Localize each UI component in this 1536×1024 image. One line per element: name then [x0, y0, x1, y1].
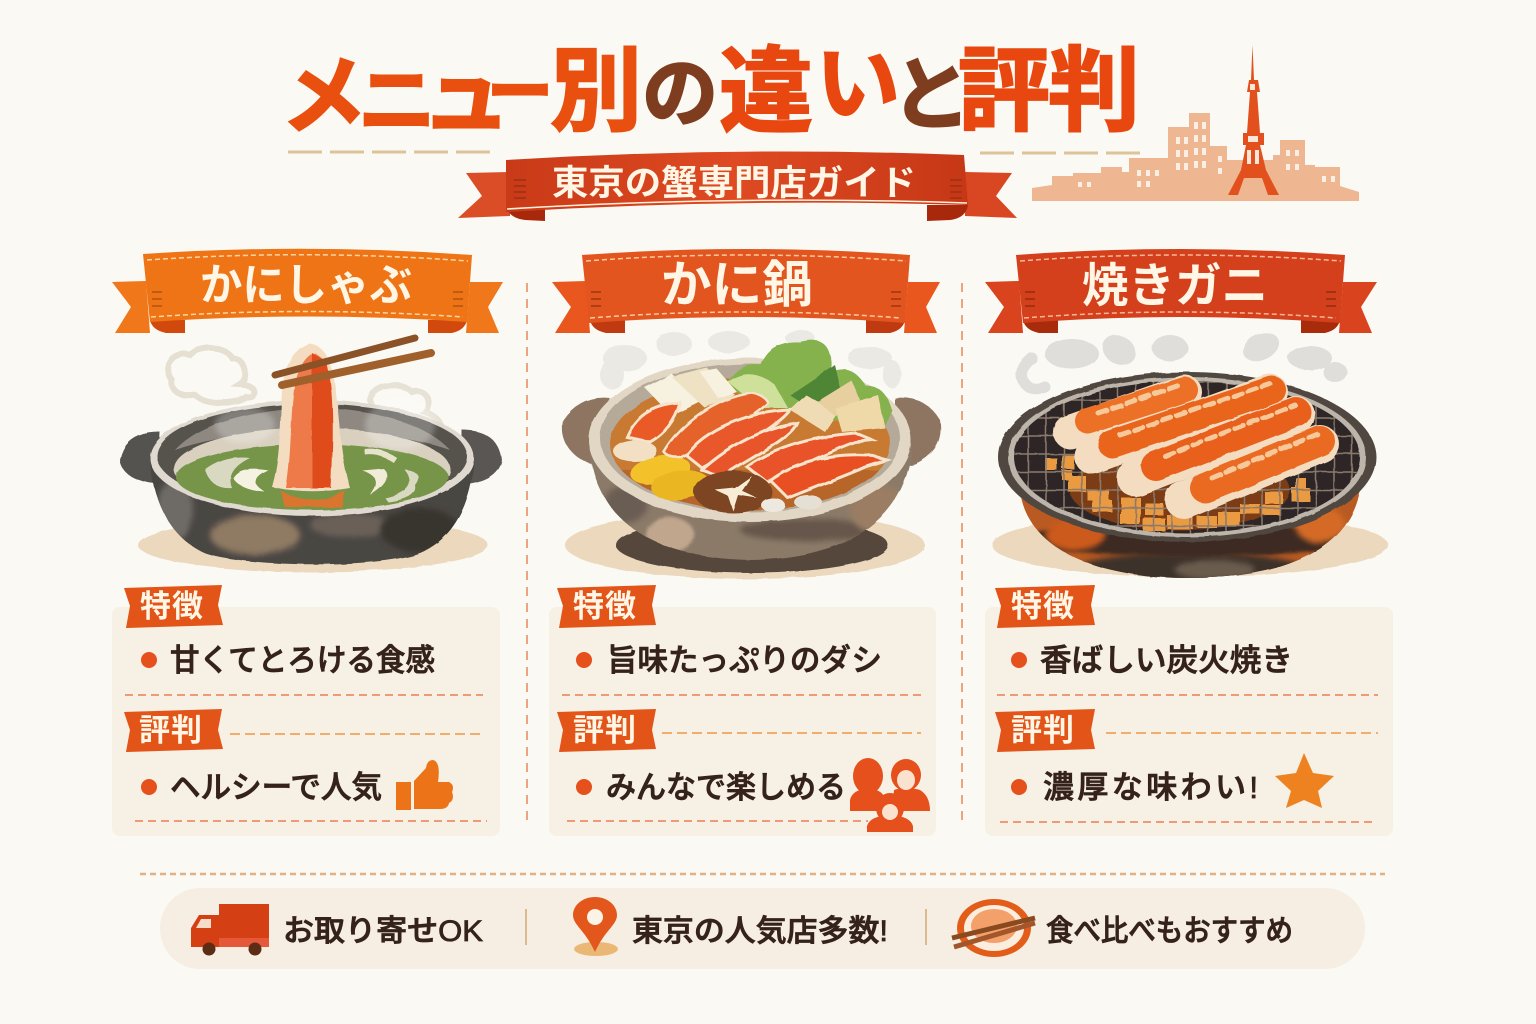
panel: kani shabu: [112, 249, 503, 836]
divider lines: [527, 283, 962, 825]
title: 違: [719, 39, 813, 144]
tag: reputation: 評判: [573, 713, 636, 748]
tag: features: [124, 585, 223, 628]
illustration: crab hot pot: [562, 330, 941, 579]
heading text: かにしゃぶ: [200, 261, 412, 310]
footer text: compare: 食べ比べもおすすめ: [1046, 915, 1293, 948]
title: 評判: [958, 41, 1140, 143]
tag: reputation: [557, 709, 656, 752]
panel: shabu text card: [112, 585, 500, 836]
footer bar: [160, 888, 1365, 969]
heading text: 焼きガニ: [1082, 259, 1268, 312]
title: 別: [550, 41, 642, 143]
illustration: shabu-shabu pot: [120, 338, 502, 572]
tag: reputation: 評判: [139, 713, 202, 748]
tower: [1228, 45, 1279, 195]
icon: truck: [191, 904, 269, 956]
title: ー: [487, 55, 553, 129]
tag: features: 特徴: [573, 589, 636, 624]
icon: group of people: [850, 758, 930, 832]
icon: map pin: [573, 897, 618, 956]
icon: plate and chopsticks: [952, 899, 1035, 957]
heading ribbon: kani nabe: [552, 249, 940, 333]
panel: kani nabe: [549, 249, 941, 836]
bullet feature: 甘くてとろける食感: [170, 643, 435, 678]
icon: star: [1275, 753, 1334, 808]
tag: reputation: 評判: [1011, 713, 1074, 748]
bullet reputation: ヘルシーで人気: [170, 770, 382, 805]
heading text: かに鍋: [661, 257, 813, 313]
tag: features: [557, 585, 656, 628]
tag: features: 特徴: [140, 589, 203, 624]
title: の: [642, 52, 718, 137]
icon: thumbs up: [396, 760, 453, 810]
illustration: grilled crab: [992, 327, 1388, 592]
heading ribbon: kani shabu: [112, 249, 503, 333]
tag: features: 特徴: [1011, 589, 1074, 624]
panel: yaki gani: [985, 249, 1388, 592]
icon: Tokyo skyline with tower: [1032, 45, 1359, 201]
subtitle text: 東京の蟹専門店ガイド: [552, 164, 916, 203]
tag: features: [995, 585, 1095, 628]
tag: reputation: [995, 709, 1095, 752]
bullet feature: 香ばしい炭火焼き: [1040, 643, 1293, 678]
title: ュ: [421, 46, 511, 146]
bullet reputation: みんなで楽しめる: [606, 770, 846, 805]
bullet feature: 旨味たっぷりのダシ: [607, 643, 882, 678]
title: ニ: [358, 57, 436, 145]
subtitle ribbon: [458, 151, 1017, 221]
title: い: [816, 37, 900, 131]
title: と: [891, 51, 971, 140]
title: [281, 37, 1140, 146]
panel: yaki text card: [985, 585, 1393, 836]
bullet reputation: 濃厚な味わい!: [1043, 770, 1258, 805]
tag: reputation: [124, 709, 223, 752]
footer text: delivery: お取り寄せOK: [283, 915, 483, 948]
panel: nabe text card: [549, 585, 936, 836]
title: メ: [281, 49, 367, 145]
crab sticks: [1070, 384, 1320, 500]
footer text: stores: 東京の人気店多数!: [632, 915, 888, 948]
heading ribbon: yaki gani: [985, 249, 1377, 333]
